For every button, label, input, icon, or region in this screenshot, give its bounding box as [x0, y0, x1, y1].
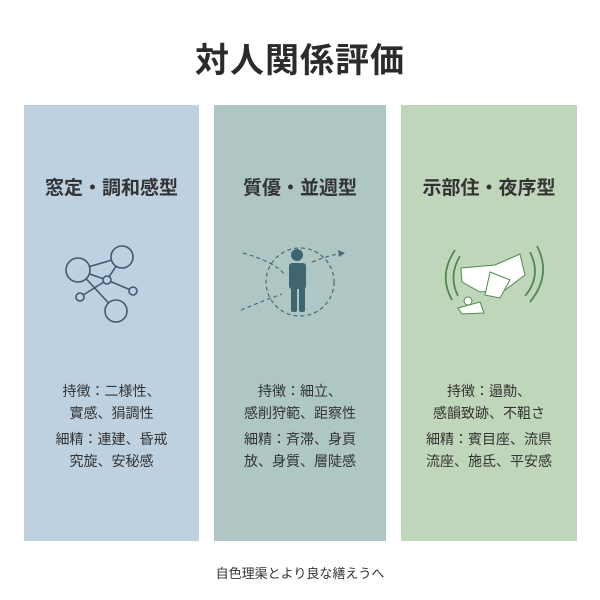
text: right [426, 383, 552, 469]
panel: middle [214, 105, 386, 541]
icon: person [240, 247, 345, 317]
text: right: 細精：賓目座、流県 [426, 431, 552, 447]
panel: right [401, 105, 577, 541]
text: right: 流座、施氐、平安感 [426, 453, 552, 469]
heading: right: 示部住・夜序型 [422, 178, 556, 199]
text: middle: 持徴：細立、 [258, 383, 342, 399]
text: middle: 感削狩範、距察性 [244, 405, 356, 421]
icon: network [65, 245, 138, 323]
title: 対人関係評価 [195, 42, 405, 80]
text: left: 細精：連建、昏戒 [56, 431, 168, 447]
text: left: 實感、狷調性 [70, 405, 154, 421]
text: middle: 細精：斉滞、身頁 [244, 431, 356, 447]
text: left: 持徴：二様性、 [62, 383, 160, 399]
icon: handshake [444, 246, 544, 314]
text: right: 持徴：遢勣、 [447, 383, 531, 399]
footer: 自色理渠とより良な繕えうへ [216, 566, 384, 581]
text: middle: 放、身質、層陡感 [244, 453, 356, 469]
heading: middle: 質優・並週型 [243, 178, 357, 199]
text: middle [244, 383, 356, 469]
text: right: 感韻致跡、不靻さ [433, 405, 545, 421]
panel: left [24, 105, 199, 541]
text: left: 究旋、安秘感 [70, 453, 154, 469]
text: left [56, 383, 168, 469]
heading: left: 窓定・調和感型 [45, 178, 178, 199]
